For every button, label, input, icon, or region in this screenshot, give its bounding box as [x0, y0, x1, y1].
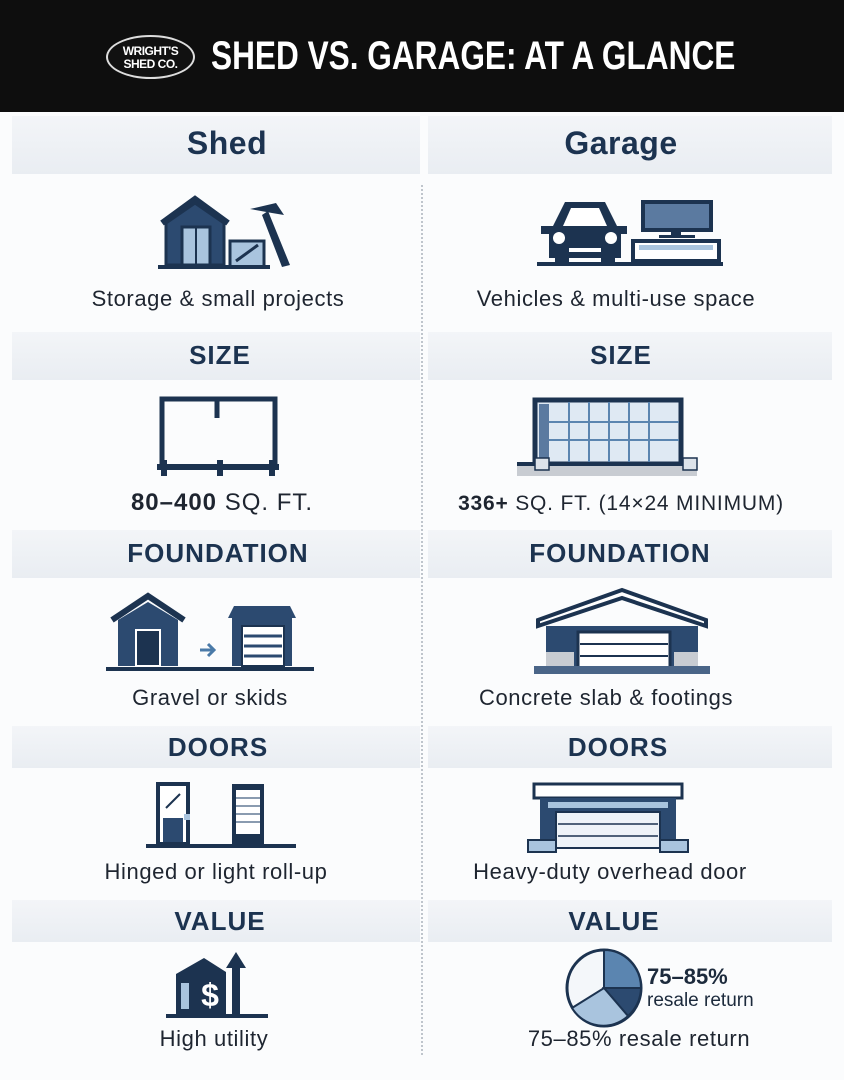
- text: shed purpose: Storage & small projects: [92, 286, 344, 311]
- heading: VALUE shed: VALUE: [174, 906, 266, 936]
- icon: value house with dollar: $: [201, 977, 219, 1013]
- icon: value house with dollar: [166, 952, 268, 1018]
- text: garage doors: Heavy-duty overhead door: [473, 859, 747, 884]
- icon: hinged and roll-up doors: [146, 782, 296, 848]
- icon: pie chart: [566, 948, 642, 1028]
- icon: overhead door: [527, 782, 689, 853]
- text: shed size: 80–400 SQ. FT.: [131, 489, 313, 516]
- pie label: [647, 964, 754, 1011]
- text: garage size: 336+ SQ. FT. (14×24 MINIMUM): [458, 492, 784, 515]
- logo: WRIGHT'S: [123, 44, 178, 58]
- heading: Garage: Garage: [564, 125, 678, 161]
- heading: FOUNDATION garage: FOUNDATION: [529, 538, 711, 568]
- bands: [12, 116, 420, 174]
- text: shed doors: Hinged or light roll-up: [105, 859, 327, 884]
- pie label: 75–85%: [647, 964, 728, 989]
- icon: shed to garage: [106, 592, 314, 671]
- heading: SIZE garage: SIZE: [590, 340, 652, 370]
- icon: garage size: [517, 398, 698, 476]
- title: SHED VS. GARAGE: AT A GLANCE: [211, 34, 735, 78]
- logo: SHED CO.: [123, 57, 178, 71]
- text: garage value: 75–85% resale return: [528, 1026, 750, 1051]
- pie label: resale return: [647, 990, 754, 1011]
- logo: [106, 35, 195, 79]
- icon: floor plan: [157, 396, 279, 476]
- heading: SIZE shed: SIZE: [189, 340, 251, 370]
- text: garage purpose: Vehicles & multi-use space: [477, 286, 755, 311]
- icon: car and tv stand: [537, 200, 723, 266]
- heading: FOUNDATION shed: FOUNDATION: [127, 538, 309, 568]
- text: garage foundation: Concrete slab & footings: [479, 685, 733, 710]
- heading: Shed: Shed: [187, 125, 267, 161]
- icon: garage on slab: [534, 588, 710, 674]
- heading: DOORS shed: DOORS: [168, 732, 268, 762]
- header bar: [0, 0, 844, 112]
- icon: shed with hammer: [158, 195, 290, 269]
- heading: DOORS garage: DOORS: [568, 732, 668, 762]
- text: shed value: High utility: [160, 1026, 268, 1051]
- text: shed foundation: Gravel or skids: [132, 685, 288, 710]
- heading: VALUE garage: VALUE: [568, 906, 660, 936]
